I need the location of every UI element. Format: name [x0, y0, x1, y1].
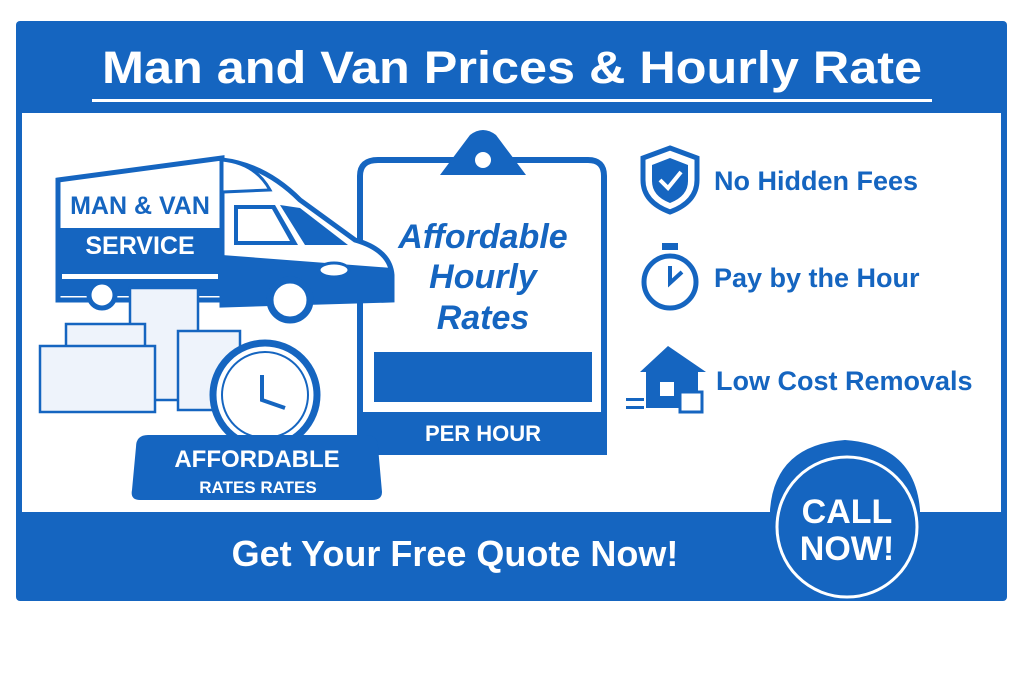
feature: no hidden fees [643, 148, 918, 212]
price tag: PER HOUR [425, 421, 541, 446]
price tag: Rates [437, 299, 529, 337]
illustration: van: SERVICE [85, 232, 195, 260]
feature: low cost removals: Low Cost Removals [716, 366, 973, 396]
illustration: van [58, 158, 392, 320]
title: Man and Van Prices & Hourly Rate [102, 42, 922, 93]
price tag [360, 130, 604, 452]
feature: pay by the hour: Pay by the Hour [714, 263, 920, 293]
badge: affordable rates [132, 435, 382, 500]
call now badge: NOW! [800, 530, 894, 568]
illustration: clock [213, 343, 317, 447]
call now badge: CALL [802, 493, 892, 531]
price tag: Affordable [397, 218, 568, 256]
badge: affordable rates: AFFORDABLE [174, 446, 340, 473]
price tag: Hourly [429, 258, 539, 296]
feature: low cost removals [626, 346, 973, 412]
feature: no hidden fees: No Hidden Fees [714, 166, 918, 196]
feature: pay by the hour [644, 243, 920, 308]
call now badge [770, 440, 920, 597]
cta text: Get Your Free Quote Now! [232, 533, 678, 574]
badge: affordable rates: RATES RATES [199, 478, 317, 497]
illustration: boxes [40, 288, 240, 412]
illustration: van: MAN & VAN [70, 192, 210, 220]
